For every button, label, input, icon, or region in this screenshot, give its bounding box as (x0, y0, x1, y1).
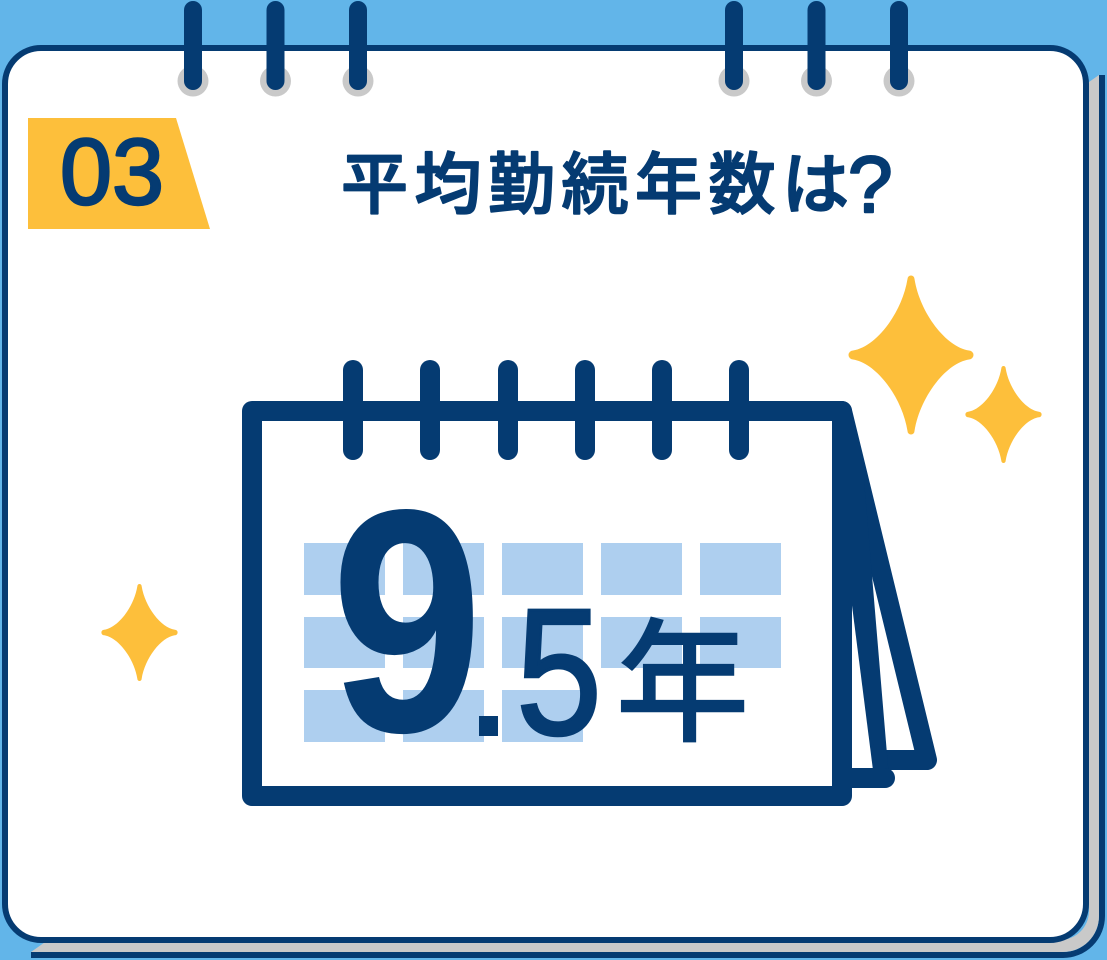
number badge (28, 118, 210, 229)
value: 9: 9 (331, 444, 483, 799)
calendar front sheet (252, 411, 842, 796)
binding rings left (178, 1, 374, 96)
value: 5: 5 (516, 572, 602, 773)
icon: sparkle large (848, 276, 974, 434)
title: 平均勤続年数は (341, 148, 856, 223)
calendar (252, 360, 927, 799)
icon: sparkle small (101, 584, 178, 681)
number badge: 03 (60, 119, 164, 224)
calendar back page near (836, 480, 889, 778)
title: ? (848, 140, 892, 229)
calendar back page far (842, 411, 927, 760)
value: year unit: 年 (615, 609, 750, 760)
binding rings right (718, 1, 914, 96)
icon: sparkle medium (965, 366, 1042, 463)
calendar rings (343, 360, 749, 460)
calendar grid cells (304, 543, 781, 742)
value: decimal point (479, 716, 498, 736)
